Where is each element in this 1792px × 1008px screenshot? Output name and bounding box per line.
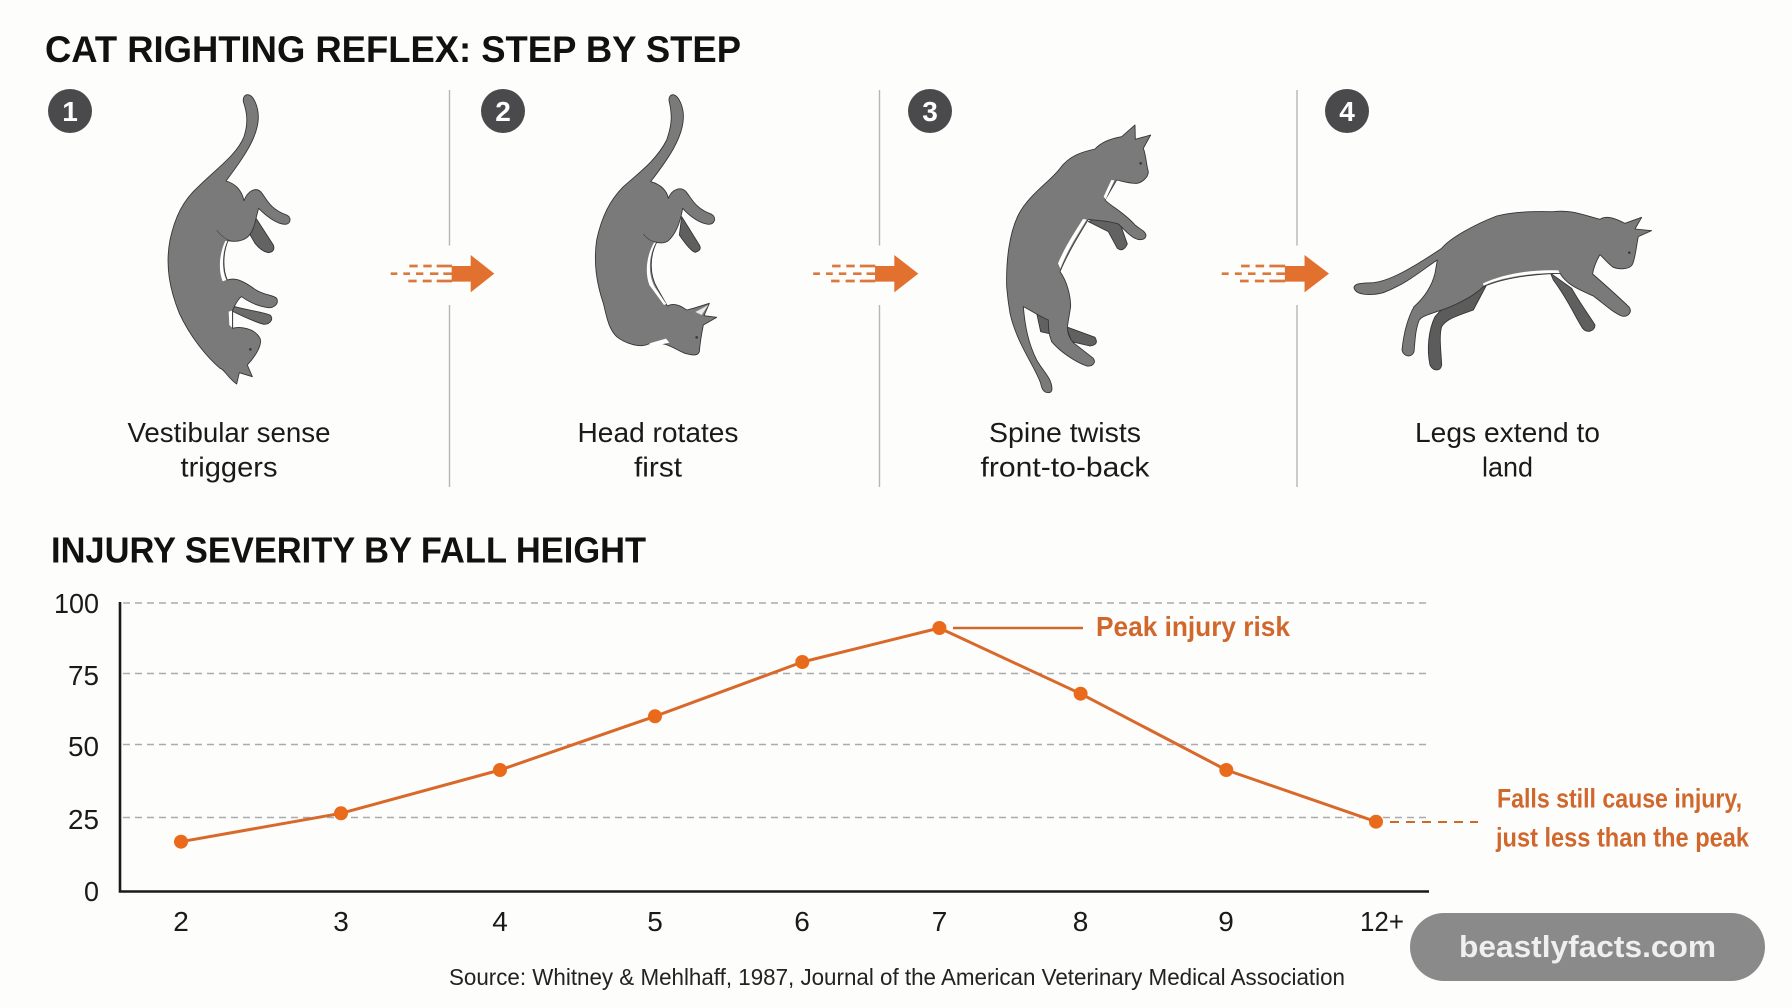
step 3 caption: Spine twists: [989, 417, 1141, 448]
x axis labels: 8: [1073, 906, 1088, 937]
callout: falls still cause injury: just less than the peak: [1495, 822, 1750, 852]
step 1 caption: [128, 417, 330, 482]
x axis labels: 4: [492, 906, 508, 937]
step dividers: [450, 90, 1297, 487]
y axis labels: 75: [68, 660, 99, 691]
step 2 caption: first: [634, 452, 682, 482]
step 4 number badge: 4: [1339, 96, 1355, 127]
step 3 number badge: [908, 89, 952, 133]
source note: Source: Whitney & Mehlhaff, 1987, Journal of the American Veterinary Medical Association: [449, 964, 1345, 990]
step 4 caption: land: [1482, 452, 1533, 482]
chart heading: INJURY SEVERITY BY FALL HEIGHT: [51, 530, 646, 570]
x axis labels: 5: [647, 906, 663, 937]
line chart: injury severity by floors fallen: [54, 588, 1429, 937]
step 3 caption: front-to-back: [980, 452, 1150, 482]
step 4 number badge: [1325, 89, 1369, 133]
icon: cat step 1, upside down: [168, 95, 290, 384]
step 1 number badge: 1: [62, 96, 78, 127]
step 4 caption: [1415, 417, 1600, 482]
callout: peak injury risk: Peak injury risk: [1096, 611, 1290, 642]
arrow: step 3 to 4: [1222, 255, 1329, 292]
step 2 caption: Head rotates: [578, 417, 738, 448]
step 4 caption: Legs extend to: [1415, 417, 1600, 448]
step 2 number badge: 2: [495, 96, 511, 127]
x axis labels: 12+: [1360, 906, 1404, 937]
arrow: step 2 to 3: [813, 255, 918, 292]
x axis labels: 2: [173, 906, 189, 937]
y axis labels: 0: [84, 876, 99, 907]
callout: falls still cause injury: Falls still cause injury,: [1497, 784, 1742, 814]
icon: cat step 3, spine twisting: [1007, 125, 1151, 393]
step 2 caption: [578, 417, 738, 482]
data line: [181, 628, 1376, 842]
x axis labels: 9: [1218, 906, 1234, 937]
y axis labels: 50: [68, 731, 99, 762]
x axis labels: 3: [333, 906, 349, 937]
watermark pill: beastlyfacts.com: [1459, 929, 1716, 964]
x axis labels: [173, 906, 1404, 937]
step 2 number badge: [481, 89, 525, 133]
step 1 caption: Vestibular sense: [128, 417, 330, 448]
step 1 caption: triggers: [180, 452, 278, 482]
step 1 number badge: [48, 89, 92, 133]
watermark pill: [1410, 913, 1765, 981]
title: CAT RIGHTING REFLEX: STEP BY STEP: [45, 29, 741, 70]
y axis labels: [54, 588, 99, 907]
step 3 caption: [980, 417, 1150, 482]
y axis labels: 25: [68, 804, 99, 835]
x axis labels: 6: [794, 906, 810, 937]
y axis labels: 100: [54, 588, 99, 619]
arrow: step 1 to 2: [391, 255, 494, 292]
step 3 number badge: 3: [922, 96, 938, 127]
data points: [174, 621, 1383, 849]
x axis labels: 7: [932, 906, 947, 937]
icon: cat step 4, legs extended: [1354, 211, 1652, 370]
icon: cat step 2, head rotated: [595, 95, 717, 355]
callout: falls still cause injury: [1390, 784, 1750, 852]
